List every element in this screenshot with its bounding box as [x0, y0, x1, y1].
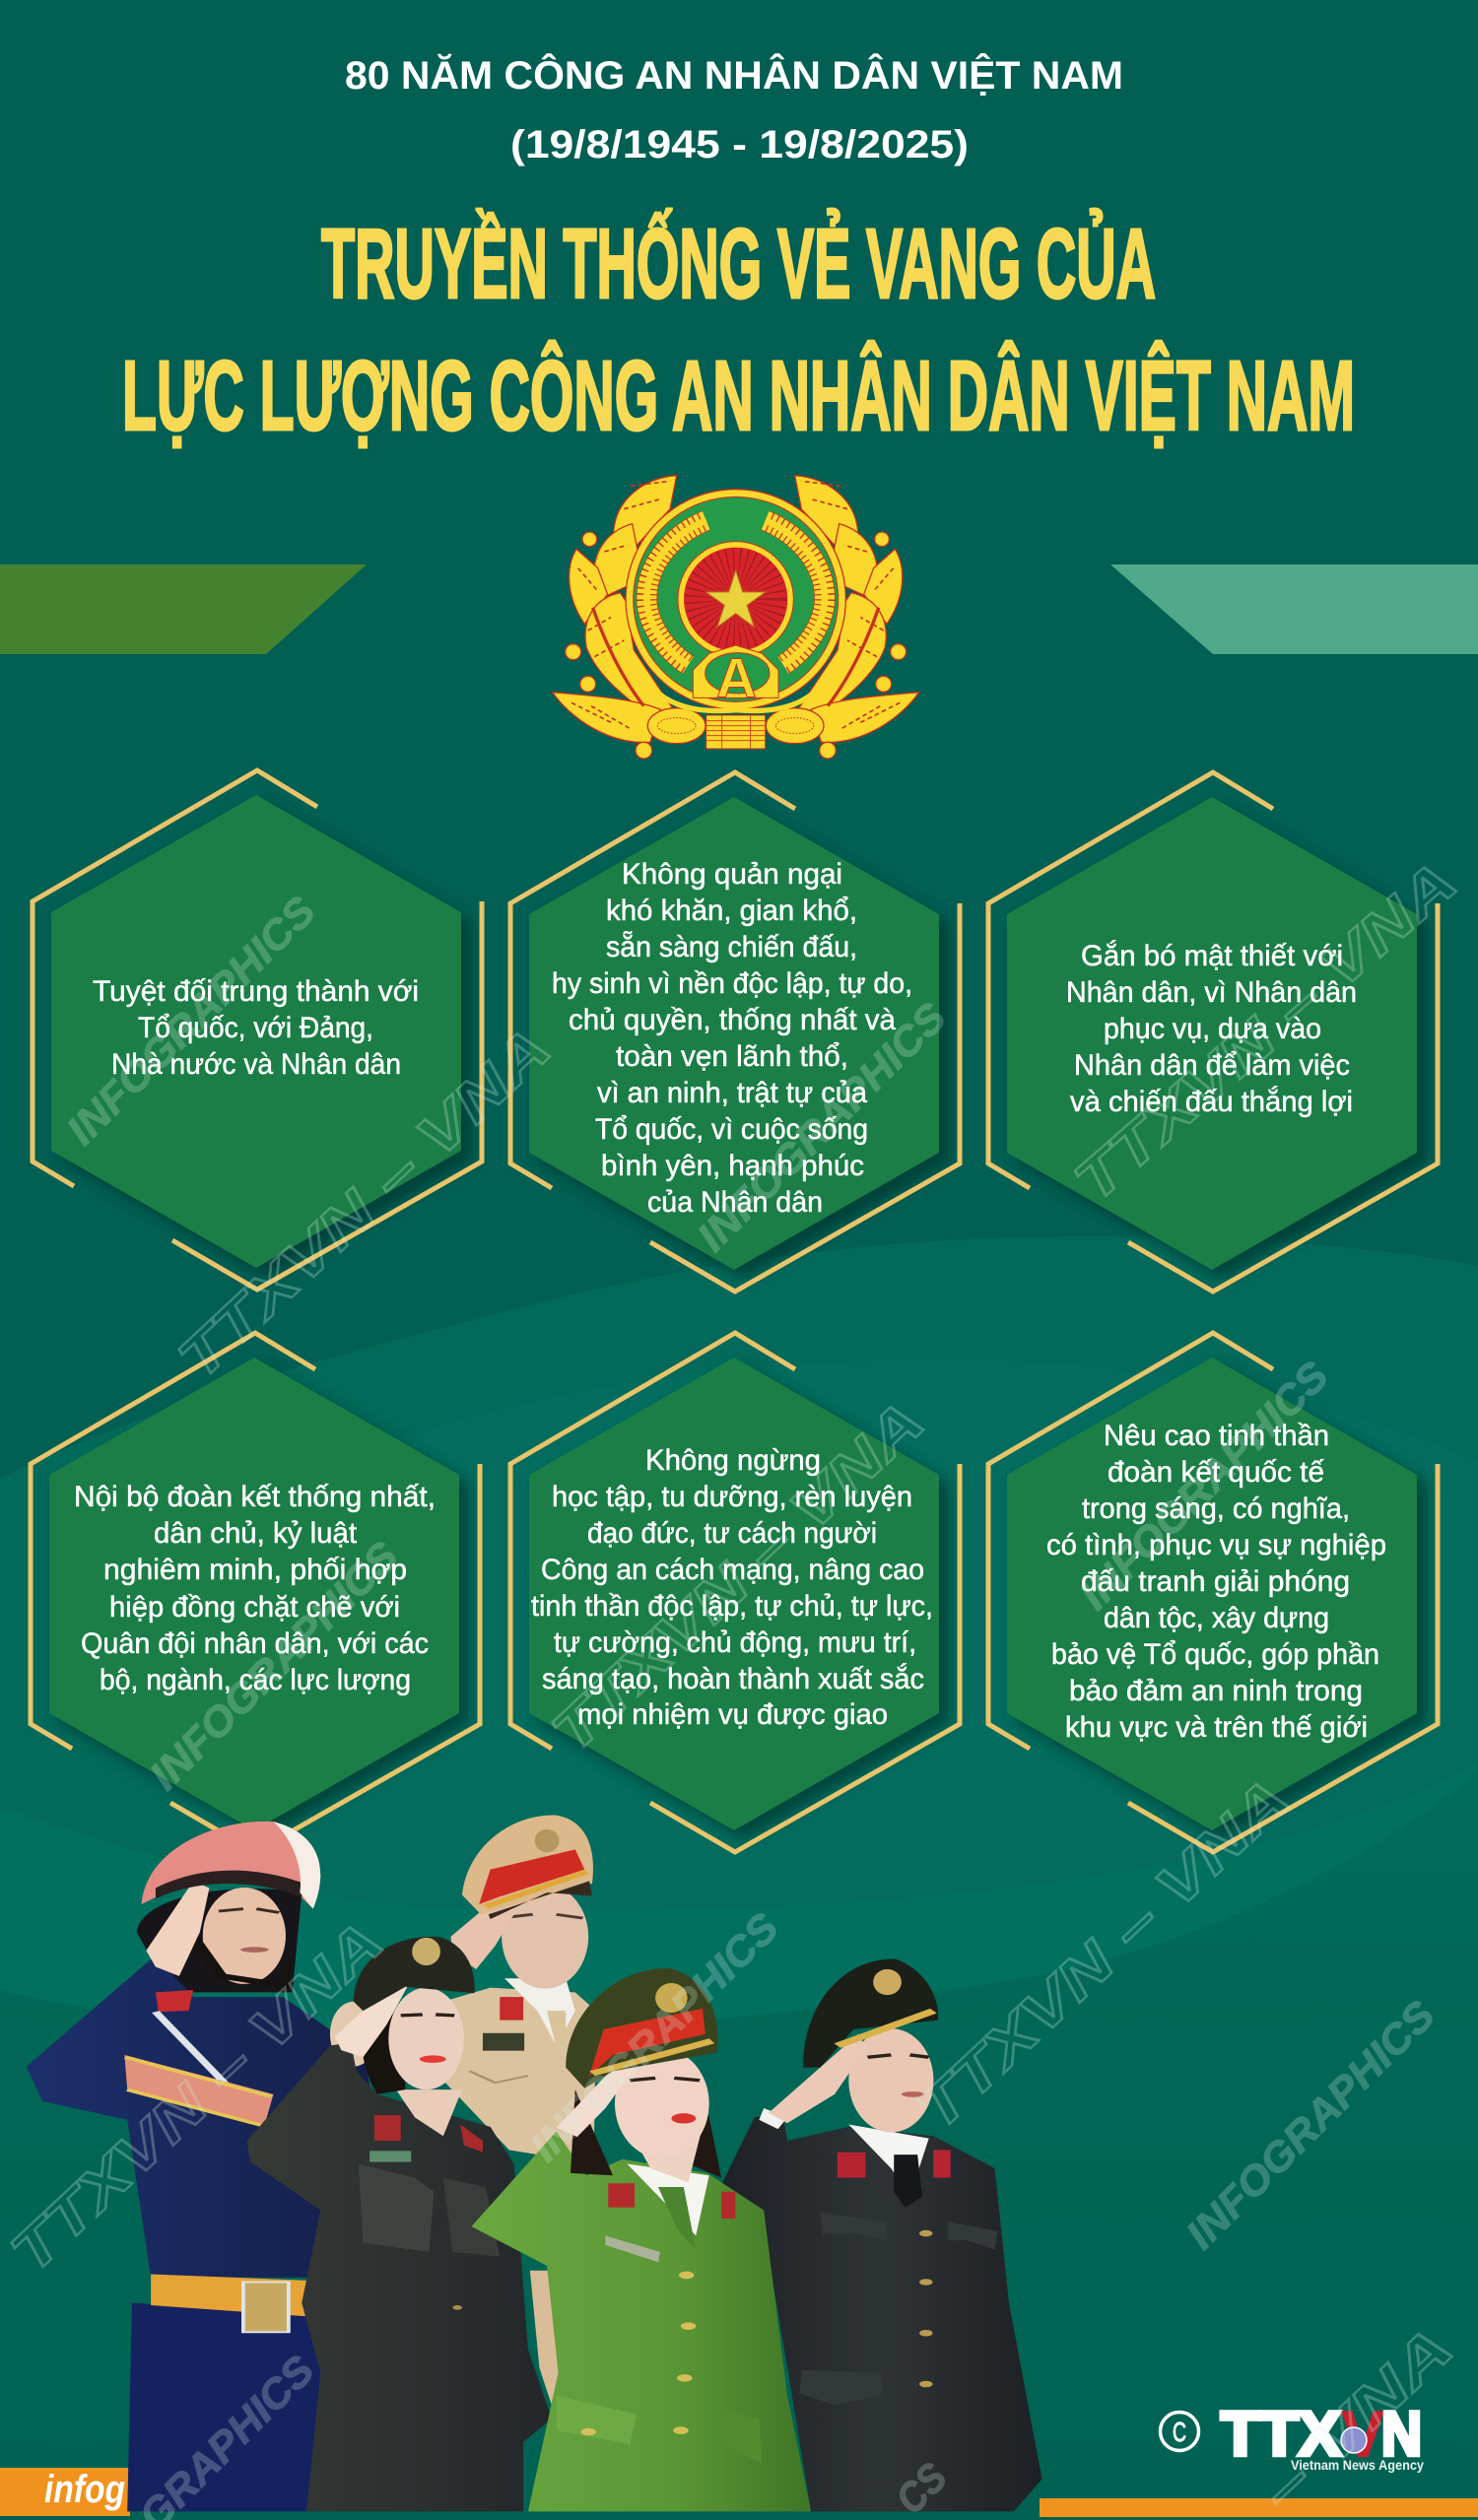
panel: international hexagon: dân tộc, xây dựng: [1104, 1602, 1329, 1634]
watermarks: INFOGRAPHICS: [689, 994, 955, 1260]
panel: study hexagon: Công an cách mạng, nâng cao: [541, 1554, 924, 1586]
panel: international hexagon: bảo đảm an ninh trong: [1069, 1675, 1363, 1707]
officer: woman in black uniform: [247, 1937, 552, 2511]
panel: unity hexagon: nghiêm minh, phối hợp: [103, 1554, 407, 1586]
officer: woman in green uniform: [472, 1968, 811, 2511]
panel: unity hexagon: [31, 1333, 480, 1852]
panel: unity hexagon: hiệp đồng chặt chẽ với: [109, 1591, 400, 1624]
watermarks: INFOGRAPHICS: [1071, 1353, 1337, 1619]
panel: study hexagon: sáng tạo, hoàn thành xuất sắc: [542, 1663, 924, 1695]
officer: black dress uniform: [721, 1958, 1041, 2511]
icon: police emblem: A: [716, 647, 757, 709]
panel: international hexagon: [988, 1333, 1438, 1852]
watermarks: TTXVN – VNA: [166, 1016, 563, 1392]
footer: orange bar right: [1040, 2498, 1478, 2517]
panel: unity hexagon: bộ, ngành, các lực lượng: [100, 1664, 411, 1696]
watermarks: INFOGRAPHICS: [1177, 1992, 1444, 2258]
panel: sacrifice hexagon: Tổ quốc, vì cuộc sống: [595, 1113, 868, 1146]
panel: sacrifice hexagon: của Nhân dân: [647, 1186, 823, 1219]
panel: people hexagon: Gắn bó mật thiết với: [1081, 940, 1343, 972]
logo: TTXVN Vietnam News Agency: Vietnam News Agency: [1291, 2457, 1424, 2473]
panel: study hexagon: Không ngừng: [645, 1444, 821, 1477]
panel: sacrifice hexagon: [510, 772, 960, 1292]
panel: people hexagon: và chiến đấu thắng lợi: [1070, 1086, 1353, 1118]
panel: study hexagon: mọi nhiệm vụ được giao: [577, 1698, 888, 1731]
watermarks: INFOGRAPHICS: [58, 888, 324, 1154]
logo: TTXVN Vietnam News Agency: [1161, 2398, 1424, 2473]
watermarks: TTXVN – VNA: [539, 1389, 936, 1765]
officer: traffic police: [443, 1816, 596, 2405]
logo: TTXVN Vietnam News Agency: TTX: [1221, 2400, 1341, 2469]
panel: loyalty hexagon: Tổ quốc, với Đảng,: [138, 1012, 373, 1044]
panel: people hexagon: Nhân dân để làm việc: [1074, 1049, 1350, 1082]
right teal banner: [1110, 564, 1478, 654]
panel: sacrifice hexagon: chủ quyền, thống nhất và: [569, 1004, 896, 1036]
watermarks: TTXVN – VNA: [1062, 849, 1468, 1215]
panel: unity hexagon: dân chủ, kỷ luật: [154, 1517, 358, 1550]
panel: loyalty hexagon: Tuyệt đối trung thành với: [93, 975, 419, 1008]
panel: sacrifice hexagon: hy sinh vì nền độc lập, tự do,: [552, 967, 912, 1000]
panel: study hexagon: tinh thần độc lập, tự chủ, tự lực,: [531, 1590, 933, 1623]
panel: international hexagon: khu vực và trên thế giới: [1065, 1711, 1368, 1744]
logo: TTXVN Vietnam News Agency: V: [1342, 2398, 1383, 2470]
panel: people hexagon: Nhân dân, vì Nhân dân: [1066, 976, 1357, 1009]
panel: sacrifice hexagon: toàn vẹn lãnh thổ,: [616, 1040, 848, 1073]
watermarks: TTXVN – VNA: [0, 1909, 395, 2286]
panel: loyalty hexagon: Nhà nước và Nhân dân: [111, 1048, 401, 1081]
header: anniversary line: 80 NĂM CÔNG AN NHÂN DÂN VIỆT NAM: [345, 52, 1123, 98]
footer: orange bar left: [0, 2468, 130, 2516]
panel: loyalty hexagon: [33, 770, 482, 1290]
panel: international hexagon: bảo vệ Tổ quốc, góp phần: [1051, 1638, 1379, 1671]
panel: study hexagon: [510, 1333, 960, 1852]
panel: sacrifice hexagon: vì an ninh, trật tự của: [597, 1077, 867, 1109]
watermarks: – VNA: [1248, 2315, 1465, 2520]
left green banner: [0, 564, 367, 654]
panel: people hexagon: phục vụ, dựa vào: [1104, 1013, 1321, 1045]
photo group: saluting officers: [27, 1816, 1041, 2511]
logo: TTXVN Vietnam News Agency: N: [1381, 2400, 1422, 2469]
header: anniversary line: [345, 52, 1123, 166]
watermarks: [0, 849, 1468, 2520]
panel: sacrifice hexagon: sẵn sàng chiến đấu,: [606, 931, 857, 963]
main title: [122, 209, 1355, 451]
panel: study hexagon: đạo đức, tư cách người: [587, 1517, 877, 1550]
watermarks: TTXVN – VNA: [905, 1766, 1302, 2143]
panel: international hexagon: trong sáng, có nghĩa,: [1082, 1492, 1350, 1525]
panel: sacrifice hexagon: khó khăn, gian khổ,: [606, 895, 857, 927]
icon: police emblem: [553, 476, 919, 759]
footer: orange bar left: infog: [44, 2468, 125, 2511]
watermarks: INFOGRAPHICS: [141, 1533, 407, 1799]
header: anniversary line: (19/8/1945 - 19/8/2025): [510, 123, 969, 166]
officer: firefighter: [27, 1822, 372, 2511]
panel: sacrifice hexagon: bình yên, hạnh phúc: [601, 1150, 864, 1182]
panel: study hexagon: tự cường, chủ động, mưu trí,: [554, 1626, 916, 1659]
panel: international hexagon: có tình, phục vụ sự nghiệp: [1046, 1529, 1386, 1561]
panel: unity hexagon: Quân đội nhân dân, với các: [81, 1627, 429, 1660]
panel: study hexagon: học tập, tu dưỡng, rèn luyện: [552, 1481, 912, 1513]
panel: sacrifice hexagon: Không quản ngại: [622, 858, 842, 891]
logo: TTXVN Vietnam News Agency: C: [1173, 2417, 1186, 2447]
panel: people hexagon: [988, 772, 1438, 1292]
watermarks: INFOGRAPHICS: [521, 1904, 787, 2170]
panel: international hexagon: đoàn kết quốc tế: [1108, 1456, 1324, 1489]
panel: international hexagon: Nêu cao tinh thần: [1104, 1420, 1329, 1452]
panel: international hexagon: đấu tranh giải phóng: [1081, 1565, 1350, 1598]
panel: unity hexagon: Nội bộ đoàn kết thống nhất,: [74, 1481, 436, 1513]
